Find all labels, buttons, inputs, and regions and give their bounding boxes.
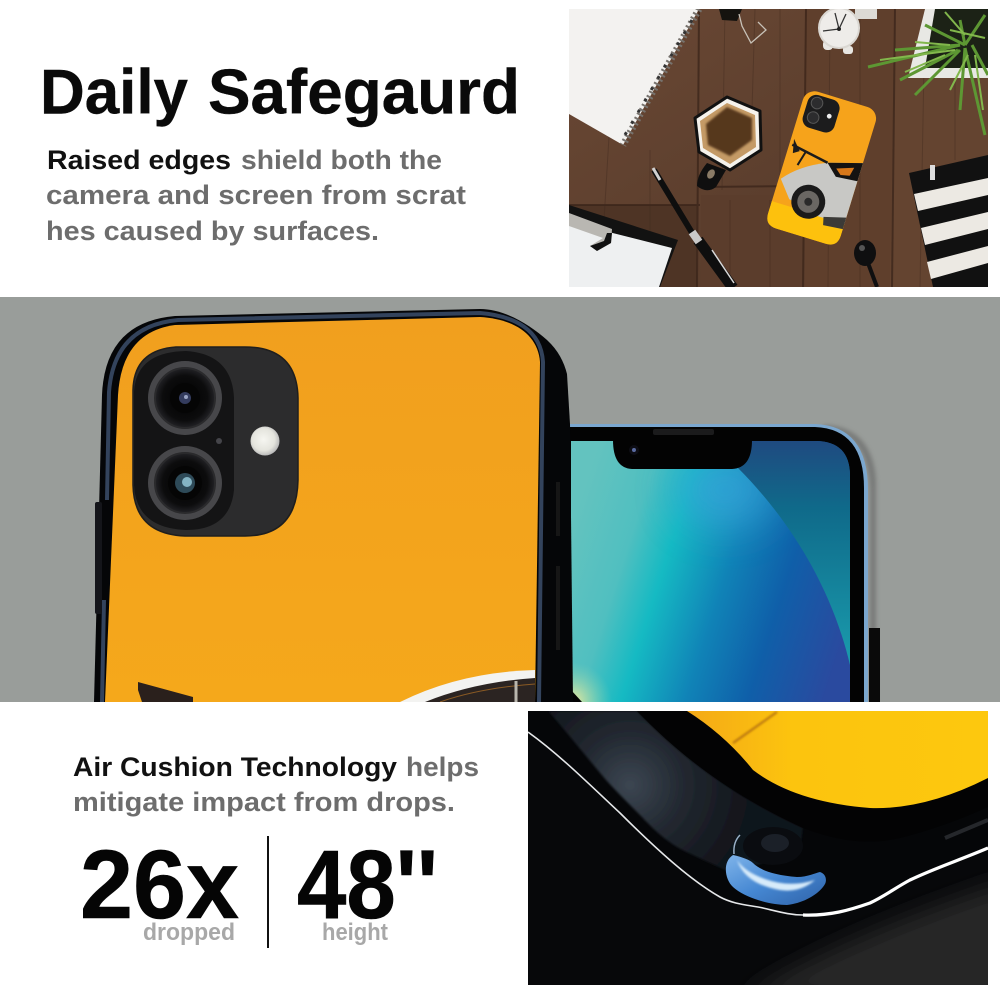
flash [250, 426, 280, 456]
title [40, 58, 520, 128]
car roof fragment [400, 670, 535, 702]
car spoiler fragment [138, 682, 193, 702]
grey product band [0, 297, 1000, 702]
case frame [94, 309, 573, 702]
air cushion pocket [726, 827, 826, 905]
text block: raised edges description [46, 145, 466, 246]
thick white rim highlight [803, 848, 988, 915]
photo: air cushion corner close-up [528, 711, 1000, 1000]
coffee cup [695, 97, 761, 190]
camera module [133, 347, 298, 536]
lens housing [134, 351, 234, 530]
title: Daily [40, 58, 188, 128]
black bezel [560, 427, 864, 702]
blue metal frame [560, 424, 868, 702]
text block: air cushion technology: mitigate impact from drops. [73, 787, 455, 817]
notch with front camera [613, 429, 752, 469]
stat: 26x dropped: dropped [143, 919, 235, 946]
striped notebook [909, 155, 988, 287]
orange back panel [105, 317, 540, 702]
text block: raised edges description: camera and screen from scrat [46, 180, 466, 210]
alarm clock [819, 8, 877, 54]
left side button [95, 502, 102, 614]
stat: 48 inch height: height [322, 919, 388, 946]
yellow case surface [687, 711, 988, 808]
text block: air cushion technology: helps [406, 752, 479, 782]
photo: phone on wooden desk [569, 8, 988, 288]
clipboard [569, 205, 678, 287]
stat: 48 inch height: 48'' [297, 830, 438, 939]
side button [869, 628, 880, 702]
divider [267, 836, 269, 948]
text block: raised edges description: hes caused by surfaces. [46, 216, 379, 246]
phone case with car print [765, 88, 879, 247]
binder clip [719, 9, 766, 43]
white rim line [528, 732, 988, 915]
phone back in orange case [94, 309, 573, 702]
black strip inside rim [528, 711, 988, 915]
lower lens [148, 446, 222, 520]
potted plant [868, 9, 988, 135]
phone front with blue frame [560, 424, 880, 702]
inner black lip [637, 711, 804, 828]
side button edge [945, 820, 988, 838]
microphone dot [216, 438, 222, 444]
text block: air cushion technology [73, 752, 479, 817]
frame blue highlight [102, 313, 543, 702]
spoon [854, 240, 877, 287]
case bumper [548, 711, 803, 870]
phone shadow [820, 425, 876, 702]
soft surface shading [758, 882, 988, 985]
pen [653, 168, 734, 288]
title: Safegaurd [208, 58, 520, 128]
text block: raised edges description: shield both the [241, 145, 442, 175]
stat: 26x dropped: 26x [80, 830, 239, 939]
orange streak [733, 712, 777, 743]
text block: air cushion technology: Air Cushion Technology [73, 752, 397, 782]
text block: raised edges description: Raised edges [47, 145, 231, 175]
frame side button grooves [556, 482, 560, 650]
upper lens [148, 361, 222, 435]
notebook with spiral binding [569, 9, 699, 145]
wallpaper screen [571, 441, 850, 702]
